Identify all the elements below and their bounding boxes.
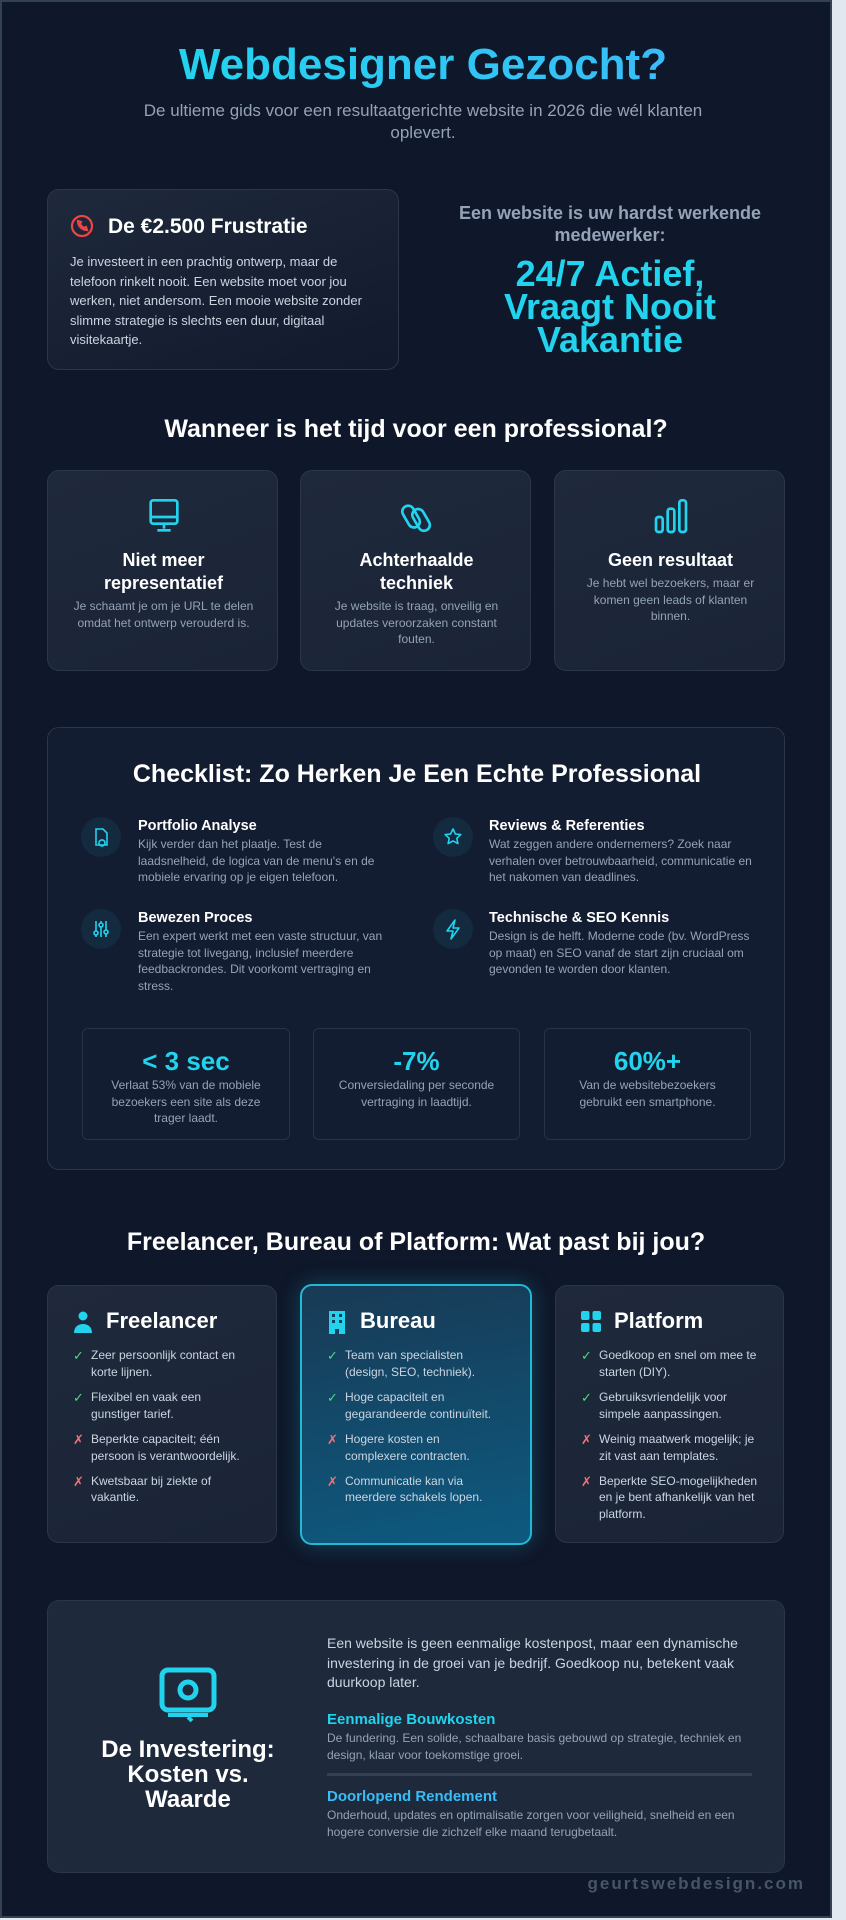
item: proces	[81, 909, 382, 993]
list: Communicatie kan via meerdere schakels lopen.	[345, 1474, 482, 1504]
callout: 24/7	[459, 203, 761, 360]
list: ✓	[327, 1348, 338, 1363]
text block: Je investeert in een prachtig ontwerp, maar de telefoon rinkelt nooit. Een website moet voor jou werken, niet andersom. Een mooie website zonder slimme strategie is slechts een duur, digitaal visitekaartje.	[70, 254, 362, 347]
list: Zeer persoonlijk contact en korte lijnen.	[91, 1348, 235, 1379]
heading	[101, 1736, 275, 1813]
block: rendement: Doorlopend Rendement	[327, 1788, 497, 1805]
list: Hoge capaciteit en gegarandeerde continuïteit.	[345, 1390, 491, 1421]
card: achterhaalde techniek	[300, 470, 531, 671]
item: techniek: Technische & SEO Kennis	[489, 910, 669, 926]
item: techniek: Design is de helft. Moderne code (bv. WordPress op maat) en SEO vanaf de start zijn cruciaal om gevonden te worden door klanten.	[489, 929, 749, 976]
heading: vergelijking: Freelancer, Bureau of Platform: Wat past bij jou?	[127, 1228, 705, 1256]
block: bouwkosten	[327, 1711, 741, 1762]
icon: bolt	[433, 909, 473, 949]
stat: 3 sec: Verlaat 53% van de mobiele bezoekers een site als deze trager laadt.	[111, 1078, 261, 1125]
title	[359, 550, 474, 593]
list: ✗	[327, 1432, 338, 1447]
card: geen resultaat	[554, 470, 785, 671]
icon: bar chart	[654, 499, 688, 534]
list: ✓	[581, 1348, 592, 1363]
stat: 60%: 60%+	[614, 1046, 681, 1076]
list: Weinig maatwerk mogelijk; je zit vast aan templates.	[599, 1432, 754, 1463]
stat: 3 sec: < 3 sec	[142, 1046, 230, 1076]
title: Bureau	[360, 1308, 436, 1333]
item: proces: Een expert werkt met een vaste structuur, van strategie tot livegang, inclusief meerdere feedbackrondes. Dit voorkomt vertraging en stress.	[138, 929, 382, 993]
icon: monitor	[149, 499, 179, 532]
stat: 3 sec	[82, 1028, 290, 1140]
heading: De €2.500 Frustratie	[108, 215, 308, 238]
title: representatief	[104, 573, 223, 593]
list: Hogere kosten en complexere contracten.	[345, 1432, 470, 1463]
icon: file	[81, 817, 121, 857]
list: Gebruiksvriendelijk voor simpele aanpassingen.	[599, 1390, 727, 1421]
card: platform	[555, 1285, 784, 1543]
block: rendement: Onderhoud, updates en optimalisatie zorgen voor veiligheid, snelheid en een hogere conversie die zichzelf elke maand terugbetaalt.	[327, 1808, 735, 1839]
callout: 24/7: 24/7 Actief,	[516, 253, 704, 294]
item: portfolio: Kijk verder dan het plaatje. Test de laadsnelheid, de logica van de menu's en de mobiele ervaring op je eigen telefoon.	[138, 837, 374, 884]
subtitle: De ultieme gids voor een resultaatgerichte website in 2026 die wél klanten oplevert.	[144, 101, 702, 142]
list	[327, 1348, 491, 1504]
item: proces: Bewezen Proces	[138, 910, 252, 926]
list: Beperkte capaciteit; één persoon is verantwoordelijk.	[91, 1432, 240, 1463]
list: Flexibel en vaak een gunstiger tarief.	[91, 1390, 201, 1421]
title: Achterhaalde	[359, 550, 474, 570]
list: Goedkoop en snel om mee te starten (DIY).	[599, 1348, 756, 1379]
list: ✗	[581, 1432, 592, 1447]
list: ✓	[73, 1390, 84, 1405]
text: Je schaamt je om je URL te delen omdat het ontwerp verouderd is.	[74, 599, 253, 630]
heading: De Investering:	[101, 1736, 275, 1763]
icon: grid	[581, 1311, 601, 1332]
panel: frustratie	[47, 189, 399, 370]
callout: 24/7: Vraagt Nooit	[504, 286, 716, 327]
icon: star	[433, 817, 473, 857]
title: techniek	[380, 573, 453, 593]
icon: bandage	[400, 504, 432, 532]
icon: person	[74, 1312, 92, 1333]
item: portfolio	[81, 817, 374, 884]
title	[104, 550, 224, 593]
icon: money	[160, 1668, 216, 1722]
list: Kwetsbaar bij ziekte of vakantie.	[91, 1474, 211, 1504]
list: ✗	[73, 1474, 84, 1489]
title: Webdesigner Gezocht?	[179, 40, 667, 89]
stat: -7%: -7%	[393, 1046, 440, 1076]
stat: -7%	[313, 1028, 520, 1140]
intro text: Een website is geen eenmalige kostenpost, maar een dynamische investering in de groei van je bedrijf. Goedkoop nu, betekent vaak duurkoop later.	[327, 1635, 738, 1690]
stat: 60%	[544, 1028, 751, 1140]
heading: Waarde	[145, 1786, 231, 1813]
text: Je hebt wel bezoekers, maar er komen geen leads of klanten binnen.	[587, 576, 754, 623]
block: rendement	[327, 1788, 735, 1839]
icon: phone	[70, 214, 94, 238]
icon: sliders	[81, 909, 121, 949]
card: niet meer representatief	[47, 470, 278, 671]
callout: 24/7: Vakantie	[537, 319, 683, 360]
text: Je website is traag, onveilig en updates veroorzaken constant fouten.	[335, 599, 498, 646]
title: Geen resultaat	[608, 550, 733, 570]
stat: 60%: Van de websitebezoekers gebruikt een smartphone.	[579, 1078, 716, 1109]
panel: checklist	[47, 727, 785, 1170]
icon: building	[329, 1311, 345, 1334]
heading: Checklist: Zo Herken Je Een Echte Professional	[133, 760, 701, 788]
stat: -7%: Conversiedaling per seconde vertraging in laadtijd.	[339, 1078, 494, 1109]
list: ✗	[581, 1474, 592, 1489]
item: reviews: Reviews & Referenties	[489, 818, 645, 834]
title: Platform	[614, 1308, 703, 1333]
list: ✗	[73, 1432, 84, 1447]
list: Team van specialisten (design, SEO, techniek).	[345, 1348, 475, 1379]
card: bureau	[300, 1284, 532, 1545]
item: techniek	[433, 909, 749, 976]
list	[73, 1348, 240, 1504]
heading: wanneer: Wanneer is het tijd voor een professional?	[164, 415, 668, 443]
list	[581, 1348, 757, 1521]
title: Niet meer	[122, 550, 205, 570]
block: bouwkosten: De fundering. Een solide, schaalbare basis gebouwd op strategie, techniek en design, klaar voor toekomstige groei.	[327, 1731, 741, 1762]
callout: 24/7: Een website is uw hardst werkende medewerker:	[459, 203, 761, 245]
block: bouwkosten: Eenmalige Bouwkosten	[327, 1711, 495, 1728]
title: Freelancer	[106, 1308, 217, 1333]
item: reviews: Wat zeggen andere ondernemers? Zoek naar verhalen over betrouwbaarheid, communicatie en het nakomen van deadlines.	[489, 837, 752, 884]
list: Beperkte SEO-mogelijkheden en je bent afhankelijk van het platform.	[599, 1474, 757, 1521]
list: ✓	[581, 1390, 592, 1405]
panel: investering	[47, 1600, 785, 1873]
list: ✓	[73, 1348, 84, 1363]
list: ✓	[327, 1390, 338, 1405]
footer: brand: geurtswebdesign.com	[588, 1874, 805, 1893]
item: reviews	[433, 817, 752, 884]
list: ✗	[327, 1474, 338, 1489]
heading: Kosten vs.	[127, 1761, 249, 1788]
item: portfolio: Portfolio Analyse	[138, 818, 257, 834]
card: freelancer	[47, 1285, 277, 1543]
